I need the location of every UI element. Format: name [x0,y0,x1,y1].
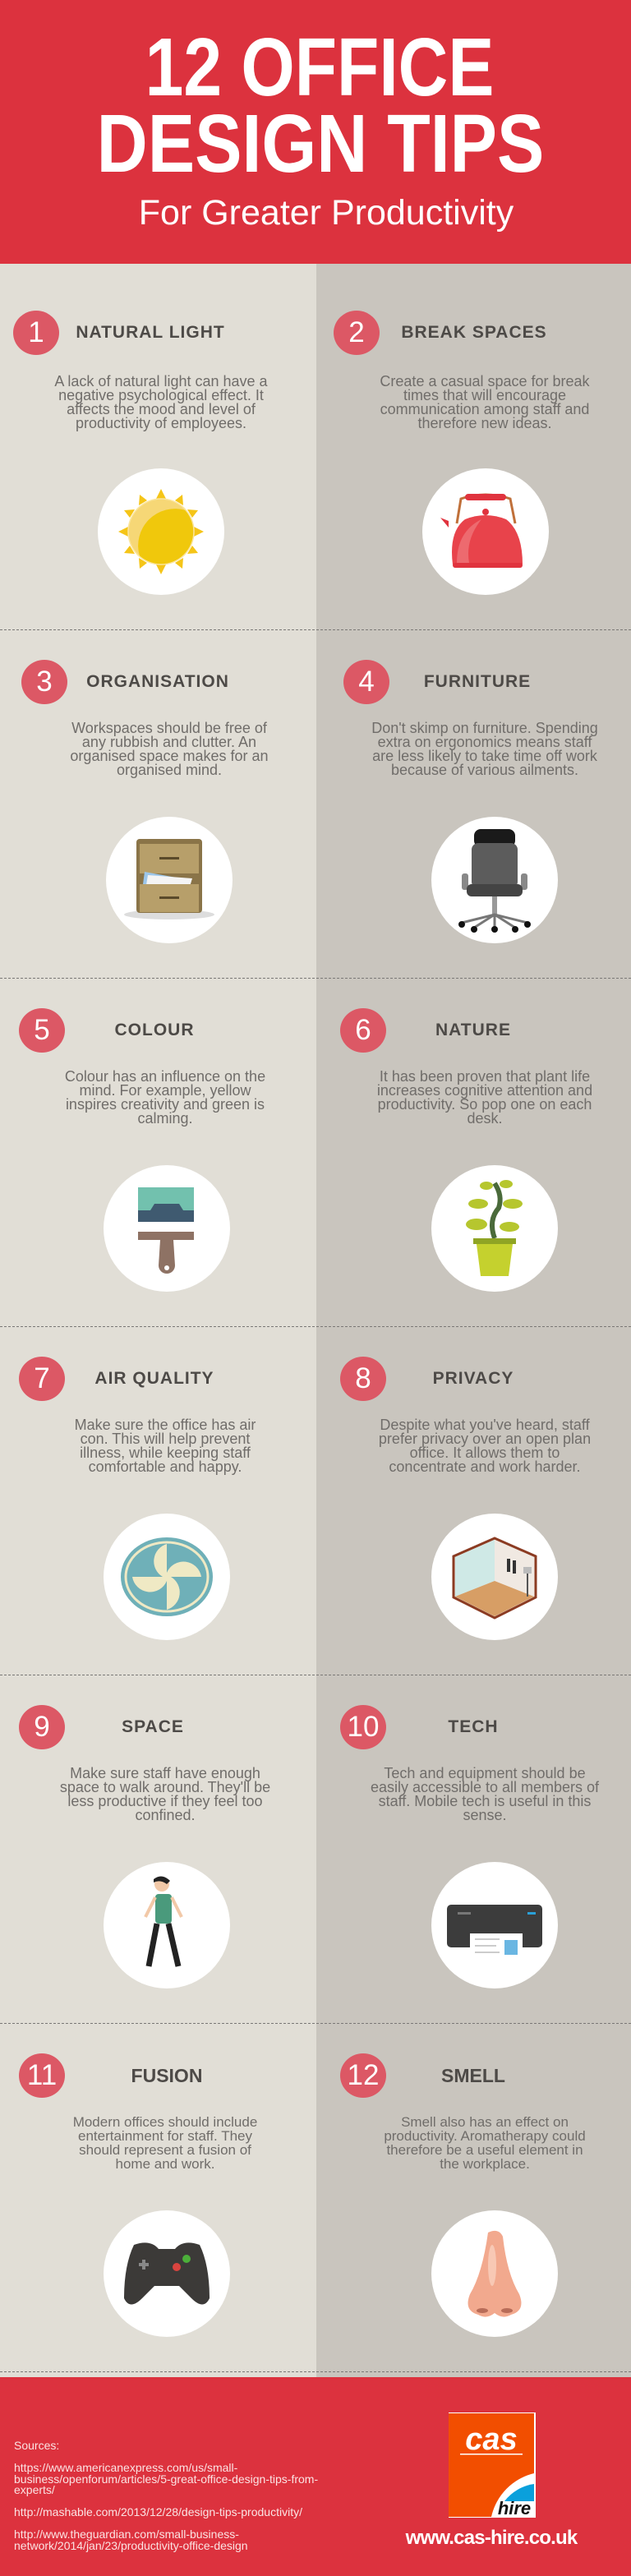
text: A lack of natural light can have a [54,373,268,389]
panel: tip 5 colour [19,1008,265,1292]
number 3: 3 [36,666,53,698]
text: easily accessible to all members of [371,1779,599,1795]
icon: plant [431,1165,558,1292]
background: left column [0,264,316,2379]
sources text: network/2014/jan/23/productivity-office-design [14,2539,248,2552]
number 5 [19,1008,65,1053]
text: times that will encourage [403,387,566,403]
number 6: 6 [355,1014,371,1046]
heading: COLOUR [115,1021,194,1039]
icon: office chair [431,817,558,943]
text: productivity. So pop one on each [378,1096,592,1113]
text: entertainment for staff. They [78,2128,252,2144]
panel: tip 12 smell [340,2053,586,2337]
website url: www.cas-hire.co.uk [406,2527,577,2549]
number 9 [19,1705,65,1749]
text: Make sure staff have enough [70,1765,260,1781]
text [70,720,269,778]
panel: tip 9 space [19,1705,270,1988]
text [380,373,590,431]
heading: PRIVACY [433,1369,514,1388]
text: home and work. [116,2156,214,2172]
sources text: Sources: [14,2439,59,2452]
panel: tip 2 break spaces [334,311,590,595]
icon: filing cabinet [106,817,233,943]
text: organised mind. [117,762,222,778]
footer [0,2377,631,2576]
text: Make sure the office has air [75,1417,256,1433]
panel: tip 7 air quality [19,1357,256,1640]
text: confined. [135,1807,196,1823]
number 6 [340,1008,386,1053]
text: should represent a fusion of [79,2142,251,2158]
text: any rubbish and clutter. An [82,734,256,750]
text: productivity of employees. [76,415,246,431]
text: Create a casual space for break [380,373,590,389]
text: the workplace. [440,2156,530,2172]
heading: SMELL [441,2065,505,2086]
text [371,1765,599,1823]
text: prefer privacy over an open plan [379,1431,591,1447]
number 8 [340,1357,386,1401]
text: are less likely to take time off work [372,748,597,764]
number 8: 8 [355,1362,371,1394]
text [54,373,268,431]
text: office. It allows them to [410,1445,560,1461]
number 11: 11 [27,2059,57,2091]
icon: walking person [104,1862,230,1988]
text: organised space makes for an [70,748,269,764]
text: Workspaces should be free of [71,720,267,736]
heading: FURNITURE [424,672,531,691]
sources text [14,2439,318,2552]
icon: paint brush [104,1165,230,1292]
text: negative psychological effect. It [58,387,264,403]
panel: tip 4 furniture [343,660,598,943]
text: Tech and equipment should be [384,1765,586,1781]
number 1: 1 [28,316,44,348]
text: Despite what you've heard, staff [380,1417,590,1433]
heading: FUSION [131,2065,202,2086]
text: Smell also has an effect on [401,2114,569,2130]
text: illness, while keeping staff [80,1445,251,1461]
text: comfortable and happy. [89,1459,242,1475]
text [60,1765,270,1823]
number 7: 7 [34,1362,50,1394]
text: affects the mood and level of [67,401,256,417]
title line 2: DESIGN TIPS [97,98,544,190]
text [73,2114,257,2172]
text: increases cognitive attention and [377,1082,592,1099]
number 9: 9 [34,1711,50,1743]
sources text: https://www.americanexpress.com/us/small- [14,2461,237,2474]
text: productivity. Aromatherapy could [384,2128,586,2144]
number 2: 2 [348,316,365,348]
text: extra on ergonomics means staff [378,734,592,750]
panel: tip 3 organisation [21,660,269,943]
heading: NATURE [435,1021,511,1039]
sources text: business/openforum/articles/5-great-office-design-tips-from- [14,2472,318,2485]
heading: TECH [448,1717,499,1736]
icon: printer [431,1862,558,1988]
text: Don't skimp on furniture. Spending [371,720,598,736]
text: therefore be a useful element in [386,2142,583,2158]
logo: cas hire: cas [465,2422,518,2457]
text [377,1068,592,1127]
panel: tip 8 privacy [340,1357,591,1640]
text: Modern offices should include [73,2114,257,2130]
panel: tip 11 fusion [19,2053,257,2337]
text: It has been proven that plant life [380,1068,590,1085]
panel: tip 6 nature [340,1008,592,1292]
sources text: experts/ [14,2483,55,2496]
text: con. This will help prevent [81,1431,250,1447]
text [379,1417,591,1475]
icon: sun [98,468,224,595]
number 2 [334,311,380,355]
number 5: 5 [34,1014,50,1046]
number 12: 12 [348,2059,379,2091]
logo: cas hire [449,2412,536,2518]
number 7 [19,1357,65,1401]
header [0,0,631,264]
number 4: 4 [358,666,375,698]
icon: room [431,1514,558,1640]
number 10: 10 [348,1711,379,1743]
number 3 [21,660,67,704]
icon: nose [431,2210,558,2337]
title line 1: 12 OFFICE [145,21,494,113]
text: less productive if they feel too [67,1793,263,1809]
text: because of various ailments. [391,762,578,778]
icon: game controller [104,2210,230,2337]
number 10 [340,1705,386,1749]
subtitle: For Greater Productivity [139,193,514,233]
text [75,1417,256,1475]
text: mind. For example, yellow [79,1082,251,1099]
text: inspires creativity and green is [66,1096,265,1113]
text: sense. [463,1807,507,1823]
text: space to walk around. They'll be [60,1779,270,1795]
text: therefore new ideas. [417,415,552,431]
heading: BREAK SPACES [401,323,547,342]
panel: tip 10 tech [340,1705,599,1988]
text [384,2114,586,2172]
number 4 [343,660,389,704]
panel: tip 1 natural light [13,311,268,595]
sources text: http://mashable.com/2013/12/28/design-tips-productivity/ [14,2505,302,2518]
sources text: http://www.theguardian.com/small-business- [14,2528,239,2541]
number 12 [340,2053,386,2098]
heading: SPACE [122,1717,184,1736]
text: staff. Mobile tech is useful in this [379,1793,591,1809]
heading: AIR QUALITY [94,1369,214,1388]
icon: kettle [422,468,549,595]
text: desk. [467,1110,503,1127]
text: concentrate and work harder. [389,1459,581,1475]
number 11 [19,2053,65,2098]
icon: fan [104,1514,230,1640]
number 1 [13,311,59,355]
heading: NATURAL LIGHT [76,323,225,342]
text [371,720,598,778]
text: communication among staff and [380,401,589,417]
text: calming. [137,1110,193,1127]
background: right column [316,264,631,2379]
text [65,1068,265,1127]
heading: ORGANISATION [86,672,229,691]
text: Colour has an influence on the [65,1068,265,1085]
